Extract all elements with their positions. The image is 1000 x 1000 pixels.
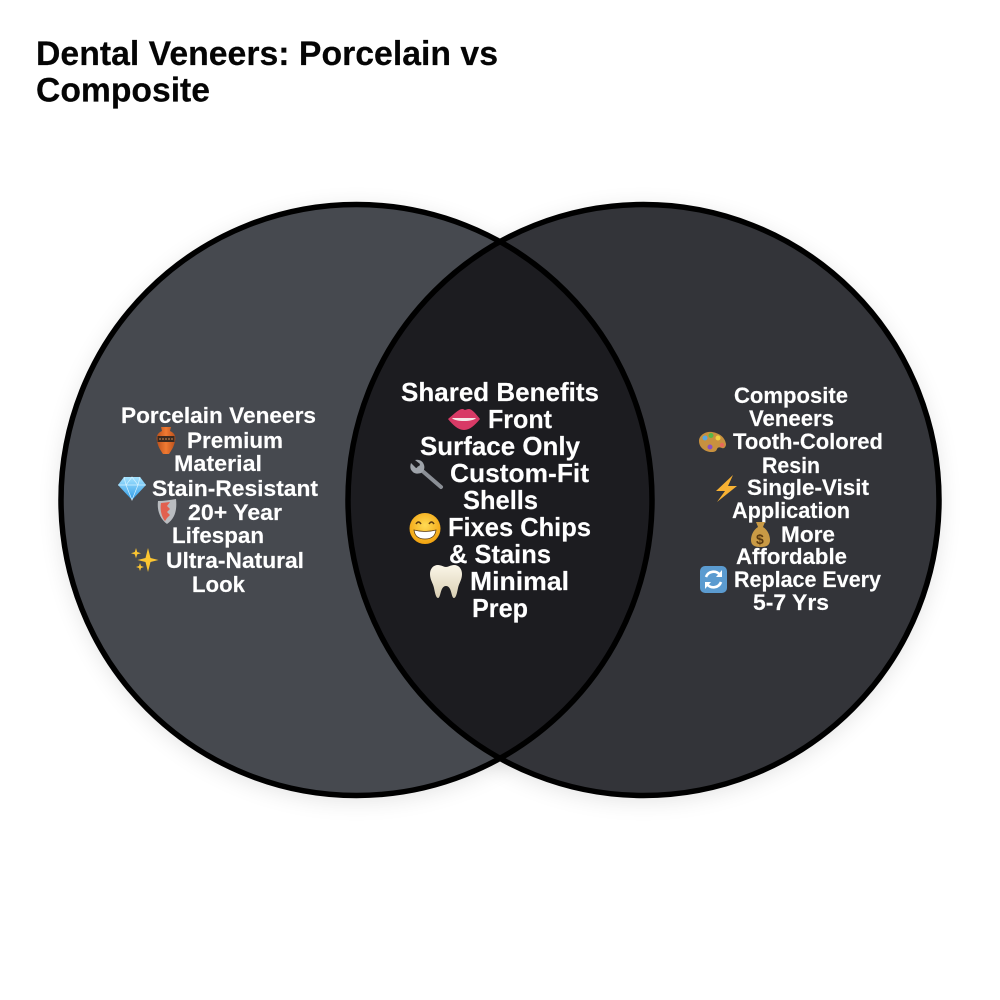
title [36, 35, 498, 110]
icon: lips [448, 409, 480, 430]
panel: porcelain circle [61, 204, 652, 796]
icon: amphora [157, 427, 175, 454]
text block: porcelain veneers: Lifespan [172, 523, 264, 548]
text block: porcelain veneers: Material [174, 451, 262, 476]
title: Composite [36, 72, 210, 110]
panel: shared overlap [348, 242, 652, 758]
text block: composite veneers [699, 383, 883, 615]
text block: shared benefits: Minimal [470, 566, 569, 596]
icon: refresh arrows [700, 566, 727, 593]
icon: shield [158, 499, 176, 524]
text block: composite veneers: 5-7 Yrs [753, 590, 829, 615]
text block: shared benefits: Shared Benefits [401, 377, 599, 407]
icon: sparkles [131, 548, 158, 572]
venn diagram [61, 204, 939, 800]
icon: money bag [751, 522, 770, 547]
text block: shared benefits: & Stains [449, 539, 551, 569]
panel: composite circle [348, 204, 939, 796]
title: Dental Veneers: Porcelain vs [36, 35, 498, 73]
text block: shared benefits: Prep [472, 593, 528, 623]
text block: porcelain veneers: Premium [187, 428, 283, 453]
text block: composite veneers: Affordable [736, 544, 847, 569]
text block: porcelain veneers [118, 403, 319, 597]
icon: money bag: $ [756, 531, 764, 547]
text block: composite veneers: Veneers [749, 406, 834, 431]
text block: porcelain veneers: 20+ Year [188, 500, 282, 525]
text block: shared benefits: Front [488, 404, 552, 434]
text block: shared benefits: Custom-Fit [450, 458, 589, 488]
text block: porcelain veneers: Porcelain Veneers [121, 403, 316, 428]
text block: composite veneers: Single-Visit [747, 475, 869, 500]
icon: wrench [410, 460, 441, 487]
text block: composite veneers: Resin [762, 453, 820, 478]
text block: shared benefits: Shells [463, 485, 538, 515]
text block: shared benefits [401, 377, 599, 623]
text block: composite veneers: More [781, 522, 835, 547]
icon: lightning bolt [716, 475, 737, 502]
text block: composite veneers: Replace Every [734, 567, 881, 592]
icon: tooth [430, 565, 462, 598]
text block: composite veneers: Composite [734, 383, 848, 408]
text block: shared benefits: Fixes Chips [448, 512, 591, 542]
text block: porcelain veneers: Stain-Resistant [152, 476, 319, 501]
icon: palette [699, 432, 726, 452]
icon: grinning face [410, 513, 440, 544]
text block: composite veneers: Tooth-Colored [733, 429, 883, 454]
text block: shared benefits: Surface Only [420, 431, 581, 461]
text block: composite veneers: Application [732, 498, 850, 523]
text block: porcelain veneers: Ultra-Natural [166, 548, 304, 573]
icon: gem [118, 477, 146, 500]
text block: porcelain veneers: Look [192, 572, 245, 597]
